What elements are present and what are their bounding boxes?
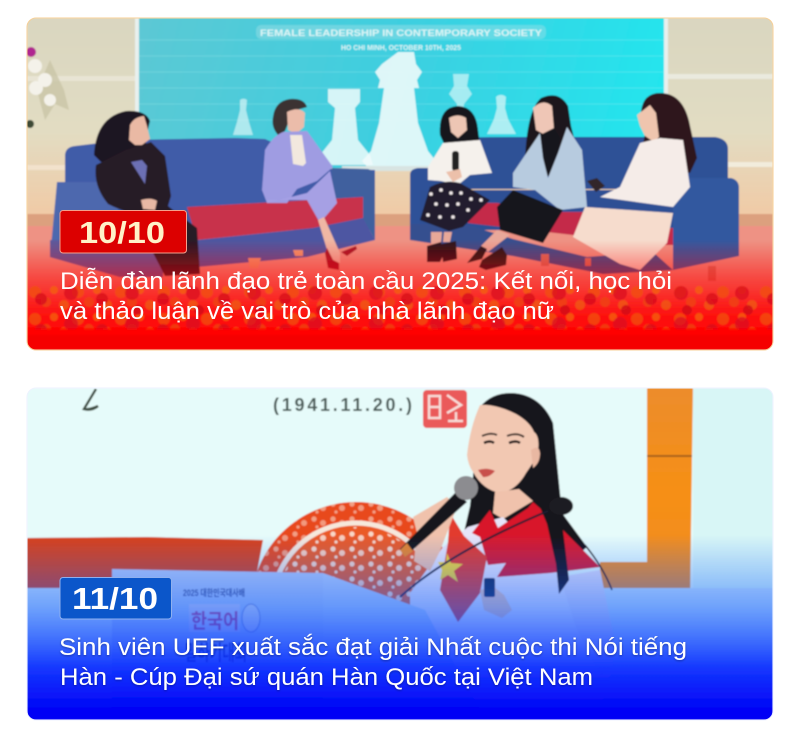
card: 11/10 Korean speaking contest: [27, 388, 773, 720]
headline 1: [60, 268, 672, 325]
ao dai: [410, 517, 613, 700]
podium: [112, 569, 485, 720]
hair back: [464, 392, 587, 552]
date badge 10/10: [60, 210, 186, 253]
face: [467, 405, 538, 493]
photo: panel discussion on stage: [26, 18, 773, 350]
hand microphone: [400, 492, 467, 555]
calligraphy marks: (1941.11.20.): [273, 395, 412, 415]
stand microphone: [400, 511, 548, 597]
left sofa: [50, 138, 375, 277]
red seal circle: [256, 501, 444, 605]
flower bed: [27, 285, 773, 330]
headline 1: và thảo luận về vai trò của nhà lãnh đạo nữ: [60, 298, 554, 325]
podium: 말하기대회: [185, 642, 247, 665]
hands: [413, 497, 457, 571]
flag: [440, 513, 487, 622]
card: 10/10 leadership forum: [26, 18, 773, 350]
led screen: HO CHI MINH, OCTOBER 10TH, 2025: [341, 43, 461, 52]
person 4: [467, 95, 587, 270]
led screen: [135, 18, 668, 168]
calligraphy marks: [84, 389, 467, 428]
person 2: [262, 99, 357, 270]
person 3: [420, 106, 492, 262]
headline 1: Diễn đàn lãnh đạo trẻ toàn cầu 2025: Kết nối, học hỏi: [60, 268, 672, 295]
card border: [27, 388, 773, 720]
date badge 10/10: 10/10: [79, 215, 165, 250]
podium: 2025 대한민국대사배: [183, 587, 245, 598]
led screen: FEMALE LEADERSHIP IN CONTEMPORARY SOCIETY: [260, 28, 543, 39]
person 5: [573, 93, 697, 270]
neck: [493, 489, 533, 519]
date badge 11/10: 11/10: [72, 581, 158, 616]
red cape: [472, 502, 600, 577]
wooden frame: [600, 388, 693, 603]
chess pieces: [233, 52, 516, 168]
card border: [27, 18, 773, 350]
headline 2: Sinh viên UEF xuất sắc đạt giải Nhất cuộc thi Nói tiếng: [59, 634, 687, 661]
person 1: [94, 111, 200, 276]
headline 2: Hàn - Cúp Đại sứ quán Hàn Quốc tại Việt Nam: [60, 664, 593, 691]
headline 2: [59, 634, 687, 691]
date badge 11/10: [60, 578, 172, 619]
right sofa: [410, 137, 739, 281]
speaker: [400, 393, 613, 700]
orchid plant: [26, 47, 69, 128]
podium: 한국어: [191, 610, 239, 633]
photo: student speaking at podium: [27, 388, 773, 720]
